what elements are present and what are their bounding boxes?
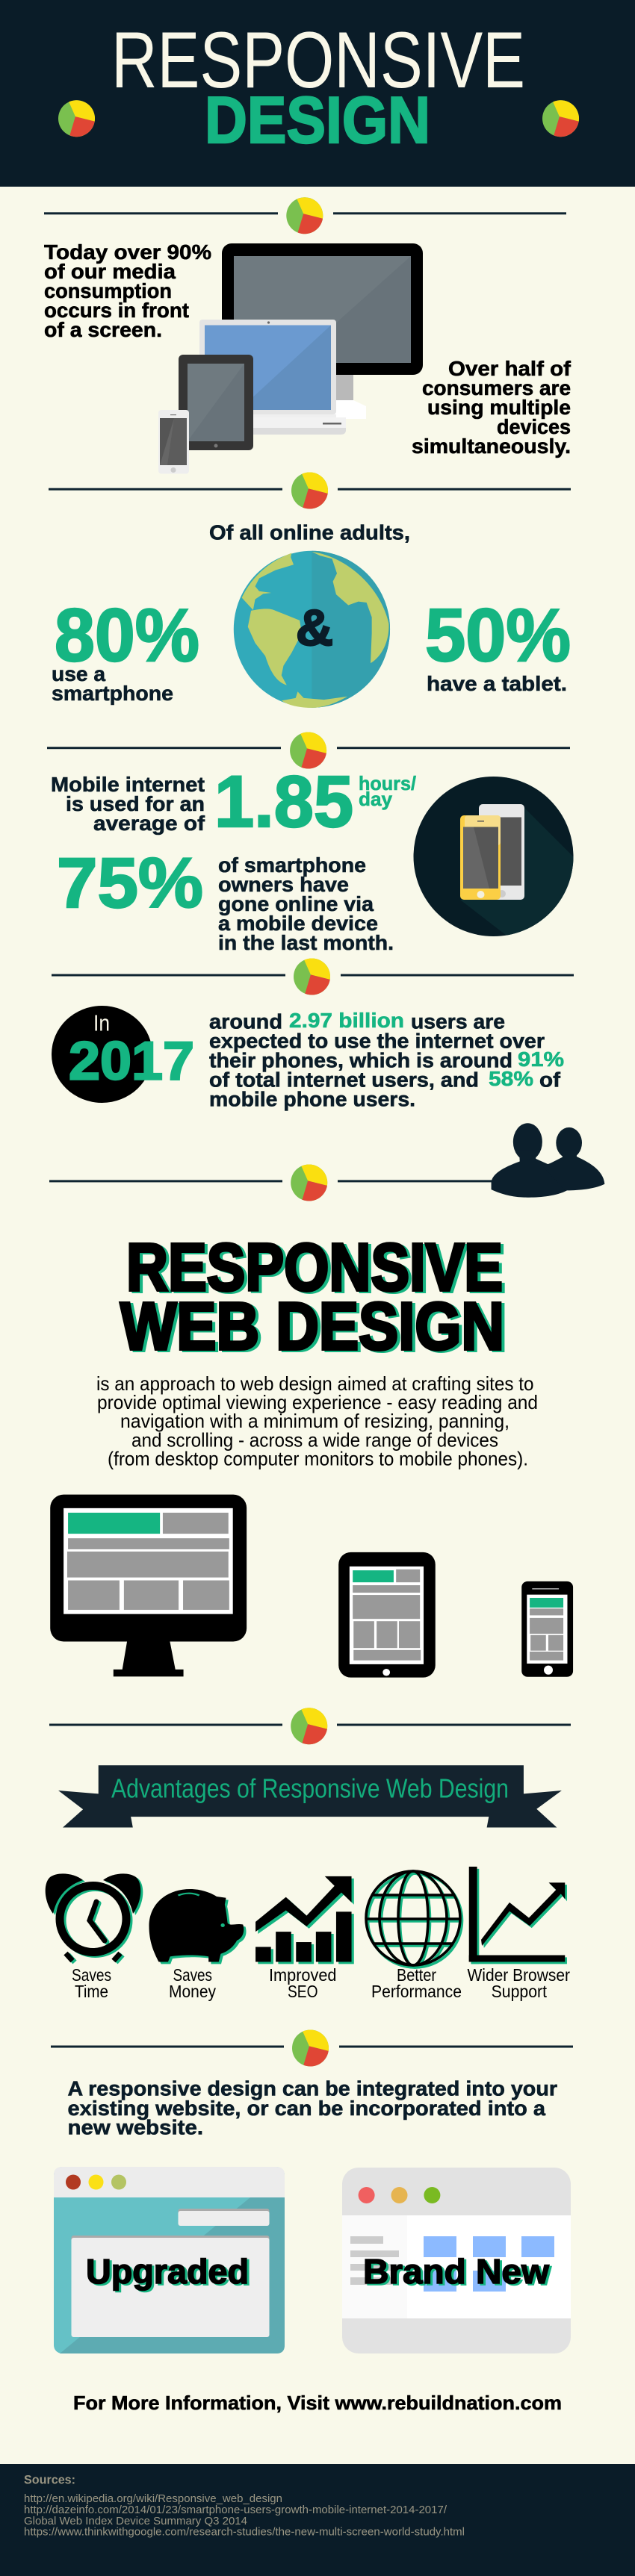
divider 2 <box>49 472 571 509</box>
footer: sources: Sources: <box>24 2473 75 2487</box>
footer: sources: Global Web Index Device Summary Q3 2014 <box>24 2515 247 2527</box>
browser: brand new: Brand New <box>365 2253 551 2292</box>
stat: 1.85 hours per day: 1.85 <box>214 761 353 842</box>
icon: globe <box>234 551 390 708</box>
advantage: wider browser support: Support <box>492 1982 548 2001</box>
stat: 75%: 75% <box>57 844 203 923</box>
text: 2.97 billion users: of <box>539 1068 561 1092</box>
text: media consumption: occurs in front <box>44 299 189 322</box>
stat: 1.85 hours per day: Mobile internet <box>51 773 205 796</box>
stat: 1.85 hours per day: hours/ <box>359 772 416 794</box>
footer: sources: https://www.thinkwithgoogle.com/research-studies/the-new-multi-screen-world-study.html <box>24 2525 465 2539</box>
divider 6 <box>49 1708 571 1744</box>
stat: 1.85 hours per day: day <box>359 788 393 810</box>
text: multiple devices: using multiple <box>427 396 571 419</box>
text: integration: new website. <box>67 2116 203 2138</box>
responsive device icons <box>50 1495 573 1678</box>
advantage: wider browser support: Wider Browser <box>468 1965 570 1985</box>
advantage: saves money: Money <box>169 1982 216 2001</box>
ampersand: & <box>296 600 333 656</box>
stat: 75%: owners have <box>218 873 349 896</box>
text: media consumption <box>44 240 211 341</box>
stat: 1.85 hours per day: average of <box>93 812 205 835</box>
text: media consumption: of a screen. <box>44 318 162 341</box>
stat: 75%: gone online via <box>218 892 374 915</box>
stat: 80%: smartphone <box>52 682 173 705</box>
text: 2.97 billion users: 91% <box>518 1048 564 1071</box>
stat: 75%: in the last month. <box>218 931 394 954</box>
divider 4 <box>52 959 574 995</box>
browser: brand new: Brand New <box>363 2252 549 2291</box>
icon: right pie <box>542 100 579 137</box>
text: 2.97 billion users: around <box>209 1010 282 1033</box>
icon: left pie <box>58 100 95 137</box>
heading: responsive web design <box>120 1231 507 1366</box>
banner: advantages: Advantages of Responsive Web Design <box>111 1773 509 1804</box>
divider 3 <box>47 732 570 769</box>
advantage: better performance: Better <box>397 1965 436 1985</box>
divider 1 <box>44 197 566 234</box>
stat: 50%: 50% <box>425 594 571 677</box>
stat: 1.85 hours per day: is used for an <box>66 792 205 815</box>
banner: advantages <box>58 1765 562 1827</box>
illustration: devices <box>158 243 423 473</box>
text: multiple devices: Over half of <box>448 357 572 380</box>
browser: upgraded: Upgraded <box>88 2253 251 2292</box>
heading: responsive web design: RESPONSIVE <box>129 1232 506 1307</box>
text: 2.97 billion users: their phones, which is around <box>209 1049 512 1072</box>
icon: desktop <box>50 1495 247 1676</box>
phone <box>158 410 189 473</box>
advantage: wider browser support <box>468 1867 570 2001</box>
laptop <box>199 320 346 435</box>
header band <box>0 0 635 187</box>
text: media consumption: Today over 90% <box>44 240 211 264</box>
stat: 75%: a mobile device <box>218 912 378 935</box>
title: Responsive: RESPONSIVE <box>111 15 525 105</box>
text: definition: and scrolling - across a wide range of devices <box>131 1429 498 1452</box>
badge: in 2017: 2017 <box>69 1032 194 1092</box>
tablet <box>179 355 253 450</box>
advantage: better performance <box>366 1871 462 2001</box>
badge: in 2017: In <box>93 1010 110 1036</box>
stat: 75%: of smartphone <box>218 853 366 877</box>
stat: 80%: 80% <box>55 594 199 677</box>
browser: upgraded: Upgraded <box>86 2252 249 2291</box>
icon: phone <box>521 1581 573 1677</box>
icon: tablet <box>338 1552 436 1678</box>
text: 2.97 billion users: 2.97 billion <box>289 1009 404 1032</box>
text: 2.97 billion users <box>209 1009 564 1111</box>
text: definition: is an approach to web design aimed at crafting sites to <box>96 1372 533 1395</box>
heading: responsive web design: RESPONSIVE <box>126 1231 503 1305</box>
stat: 1.85 hours per day <box>51 761 416 842</box>
text: integration: A responsive design can be integrated into your <box>67 2077 557 2100</box>
text: 2.97 billion users: expected to use the internet over <box>209 1030 545 1053</box>
footer: sources: http://en.wikipedia.org/wiki/Responsive_web_design <box>24 2492 282 2505</box>
browser: brand new <box>342 2168 571 2353</box>
footer: sources: http://dazeinfo.com/2014/01/23/smartphone-users-growth-mobile-internet-2014-2017/ <box>24 2504 447 2516</box>
text: media consumption: consumption <box>44 279 172 302</box>
text: multiple devices: consumers are <box>422 376 571 399</box>
text: multiple devices: devices <box>497 415 571 438</box>
heading: responsive web design: WEB DESIGN <box>120 1289 504 1364</box>
stat: 80%: use a <box>52 662 105 685</box>
divider 5 <box>49 1165 502 1201</box>
advantage: improved SEO: SEO <box>288 1982 318 2001</box>
text: definition <box>96 1372 538 1469</box>
text: media consumption: of our media <box>44 260 176 283</box>
advantage: saves time: Saves <box>72 1965 111 1985</box>
badge: in 2017 <box>52 1006 194 1103</box>
browser: upgraded <box>54 2167 285 2353</box>
text: 2.97 billion users: of total internet users, and <box>209 1068 479 1092</box>
icon: people <box>492 1123 604 1198</box>
advantage: saves time <box>46 1873 143 2001</box>
text: definition: provide optimal viewing experience - easy reading and <box>97 1391 538 1413</box>
monitor <box>222 243 423 419</box>
stat: 50%: have a tablet. <box>427 672 567 695</box>
advantage: better performance: Performance <box>371 1982 462 2001</box>
advantage: improved SEO <box>255 1876 354 2001</box>
stat: 75% <box>57 844 394 954</box>
text: multiple devices <box>412 357 572 458</box>
text: of all online adults: Of all online adults, <box>209 520 410 544</box>
text: 2.97 billion users: users are <box>411 1010 505 1033</box>
advantage: saves time: Time <box>75 1982 108 2001</box>
text: integration: existing website, or can be incorporated into a <box>67 2097 545 2120</box>
text: integration <box>67 2077 557 2138</box>
call to action: For More Information, Visit www.rebuildnation.com <box>73 2392 562 2414</box>
text: definition: (from desktop computer monitors to mobile phones). <box>108 1447 528 1469</box>
heading: responsive web design: WEB DESIGN <box>123 1291 507 1366</box>
divider 7 <box>51 2029 573 2067</box>
advantage: saves money <box>149 1889 247 2001</box>
advantage: improved SEO: Improved <box>269 1965 336 1985</box>
icon: phones in circle <box>414 777 574 936</box>
title: Design: DESIGN <box>205 83 430 157</box>
text: 2.97 billion users: 58% <box>489 1067 533 1090</box>
text: definition: navigation with a minimum of resizing, panning, <box>120 1410 509 1432</box>
advantage: saves money: Saves <box>173 1965 212 1985</box>
footer: sources <box>0 2464 635 2576</box>
text: 2.97 billion users: mobile phone users. <box>209 1088 415 1111</box>
text: multiple devices: simultaneously. <box>412 435 571 458</box>
